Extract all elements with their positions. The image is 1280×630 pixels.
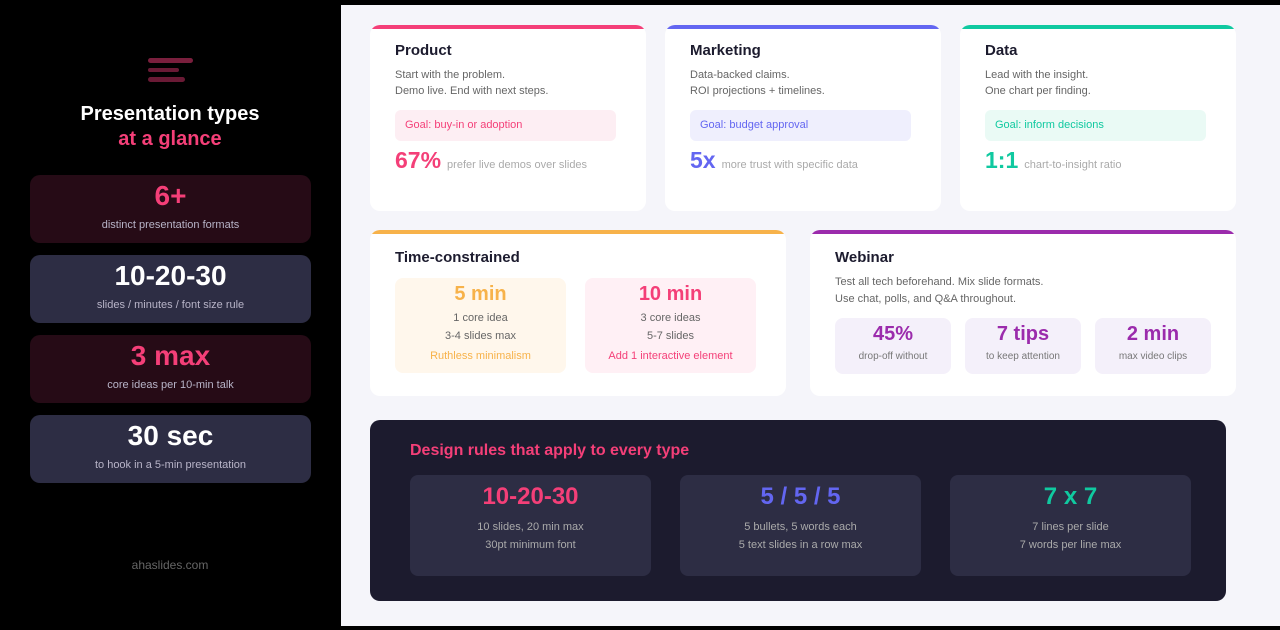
rule: 10-20-30 <box>410 475 651 576</box>
box: 10 min: Add 1 interactive element <box>608 350 733 362</box>
footer: source: ahaslides.com <box>132 558 208 572</box>
stat: 45%: 45% <box>873 323 913 345</box>
text: marketing description: Data-backed claims. <box>690 69 790 81</box>
heading: design rules: Design rules that apply to every type <box>410 442 689 459</box>
stat: 45%: drop-off without <box>859 351 927 362</box>
title <box>81 103 259 150</box>
panel: right background <box>341 5 1280 626</box>
goal: marketing: Goal: budget approval <box>700 119 808 131</box>
rule: 5/5/5: 5 bullets, 5 words each <box>744 521 857 533</box>
text: product description: Start with the problem. <box>395 69 505 81</box>
rule: 5/5/5: 5 / 5 / 5 <box>760 483 841 510</box>
stat: 6+: 6+ <box>155 180 186 211</box>
goal: data: Goal: inform decisions <box>995 119 1104 131</box>
text: webinar description: Use chat, polls, and Q&A throughout. <box>835 293 1016 305</box>
rule: 5/5/5: 5 text slides in a row max <box>739 539 862 551</box>
icon: menu lines <box>148 58 193 82</box>
rule: 7x7 <box>950 475 1191 576</box>
stat: 45% <box>835 318 951 374</box>
box: 10 min: 3 core ideas <box>641 312 700 324</box>
rule: 5/5/5 <box>680 475 921 576</box>
box: 5 min: 5 min <box>454 283 507 305</box>
box: 5 min <box>395 278 566 373</box>
panel: Time-constrained <box>370 230 786 396</box>
text: marketing description <box>690 69 825 97</box>
text: webinar description: Test all tech beforehand. Mix slide formats. <box>835 276 1043 288</box>
heading: Time-constrained: Time-constrained <box>395 249 520 266</box>
stat: 30 sec: to hook in a 5-min presentation <box>95 459 246 471</box>
text: marketing description: ROI projections + timelines. <box>690 85 825 97</box>
text: data description <box>985 69 1091 97</box>
stat: 3 max: core ideas per 10-min talk <box>107 379 234 391</box>
box: 5 min: 3-4 slides max <box>445 330 516 342</box>
stat: 2 min: 2 min <box>1127 323 1179 345</box>
stat: 10-20-30: slides / minutes / font size rule <box>97 299 244 311</box>
goal: product <box>395 110 616 141</box>
heading: Data: Data <box>985 42 1018 59</box>
stat: 10-20-30 <box>30 255 311 323</box>
stat: 1:1: 1:1 chart-to-insight ratio <box>985 147 1121 173</box>
box: 10 min <box>585 278 756 373</box>
heading: Product: Product <box>395 42 452 59</box>
rule: 7x7: 7 lines per slide <box>1032 521 1109 533</box>
stat: 6+: distinct presentation formats <box>102 219 239 231</box>
stat: 7 tips <box>965 318 1081 374</box>
panel: design rules <box>370 420 1226 601</box>
text: product description: Demo live. End with next steps. <box>395 85 548 97</box>
stat: 7 tips: to keep attention <box>986 351 1060 362</box>
stat: 67%: 67% prefer live demos over slides <box>395 147 587 173</box>
box: 10 min: 10 min <box>639 283 702 305</box>
stat: 2 min: max video clips <box>1119 351 1187 362</box>
stat: 10-20-30: 10-20-30 <box>114 260 227 291</box>
box: 5 min: Ruthless minimalism <box>430 350 531 362</box>
goal: product: Goal: buy-in or adoption <box>405 119 522 131</box>
goal: marketing <box>690 110 911 141</box>
rule: 10-20-30: 10 slides, 20 min max <box>477 521 584 533</box>
box: 5 min: 1 core idea <box>453 312 508 324</box>
panel: Product <box>370 25 646 211</box>
panel: Webinar <box>810 230 1236 396</box>
stat: 30 sec <box>30 415 311 483</box>
rule: 7x7: 7 words per line max <box>1020 539 1121 551</box>
rule: 7x7: 7 x 7 <box>1044 483 1097 510</box>
panel: Data <box>960 25 1236 211</box>
title: at a glance <box>118 128 222 150</box>
stat: 7 tips: 7 tips <box>997 323 1049 345</box>
title: Presentation types <box>81 103 259 125</box>
stat: 3 max: 3 max <box>131 340 210 371</box>
stat: 5x: 5x more trust with specific data <box>690 147 858 173</box>
text: webinar description <box>835 276 1043 305</box>
heading: Marketing: Marketing <box>690 42 761 59</box>
heading: Webinar: Webinar <box>835 249 894 266</box>
stat: 6+ <box>30 175 311 243</box>
rule: 10-20-30: 10-20-30 <box>482 483 579 510</box>
rule: 10-20-30: 30pt minimum font <box>485 539 576 551</box>
box: 10 min: 5-7 slides <box>647 330 694 342</box>
text: data description: One chart per finding. <box>985 85 1091 97</box>
text: data description: Lead with the insight. <box>985 69 1088 81</box>
stat: 2 min <box>1095 318 1211 374</box>
stat: 3 max <box>30 335 311 403</box>
panel: Marketing <box>665 25 941 211</box>
stat: 30 sec: 30 sec <box>128 420 213 451</box>
goal: data <box>985 110 1206 141</box>
text: product description <box>395 69 548 97</box>
